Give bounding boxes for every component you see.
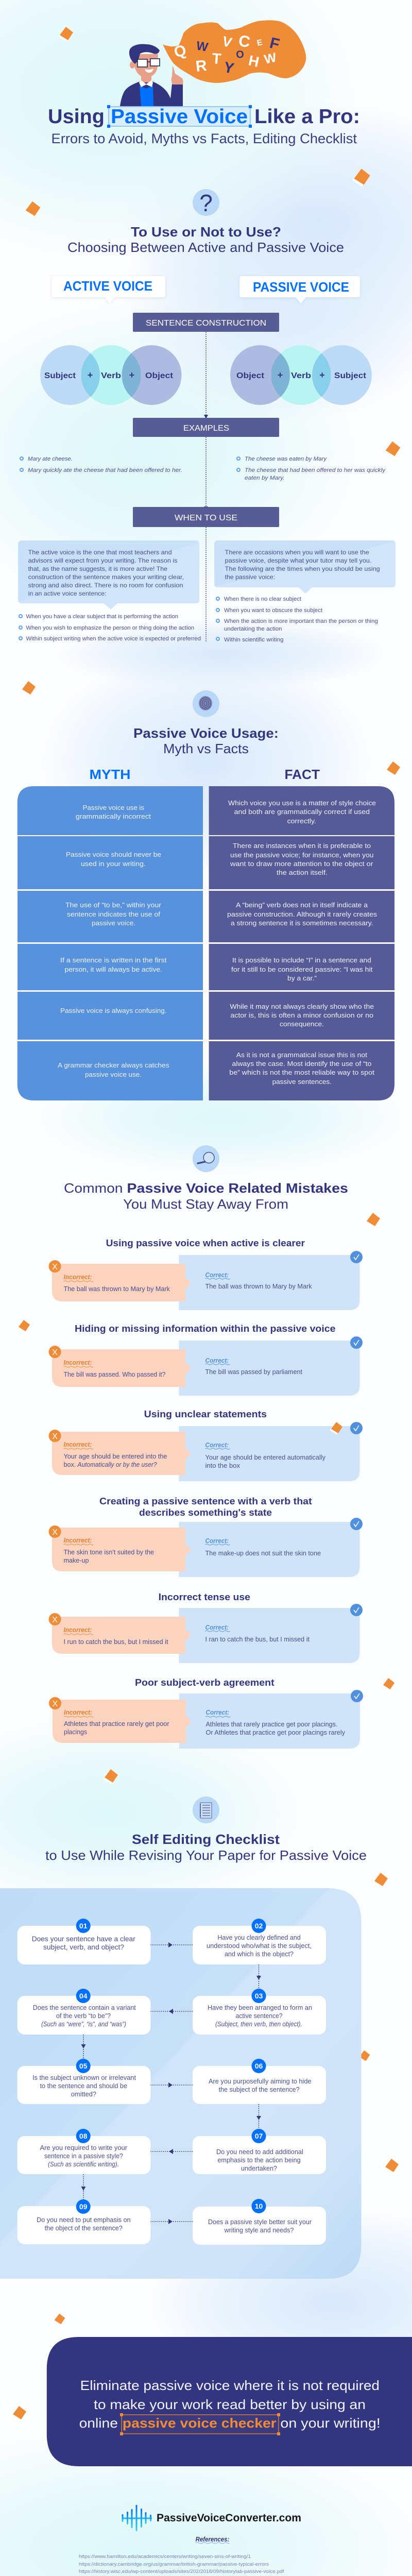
step 02: Have you clearly defined and <box>217 1934 301 1941</box>
heading: to use or not to use: Choosing Between Active and Passive Voice <box>67 240 344 255</box>
step 04 <box>18 1989 150 2035</box>
illustration: speech bubble with letters: E <box>256 38 264 48</box>
step 08 <box>18 2129 150 2174</box>
mistake 4 comparison: The skin tone isn't suited by the <box>64 1549 154 1556</box>
callout: when to use active: advisors will expect from your writing. The reason is <box>28 557 178 564</box>
panel: call to action <box>47 2337 412 2466</box>
list: active voice uses <box>19 614 201 642</box>
panel: checklist flow <box>0 1888 362 2279</box>
illustration: speech bubble with letters: O <box>235 48 245 61</box>
callout: when to use passive: The following are the times when you should be using <box>225 565 380 572</box>
mistake 3 comparison: Your age should be entered automatically <box>205 1454 326 1461</box>
step 04: of the verb “to be”? <box>56 2012 111 2020</box>
diagram: passive voice construction: Verb <box>291 371 311 380</box>
table: fact column: use the passive voice; for instance, when you <box>230 851 374 859</box>
list: passive voice uses: When you want to obscure the subject <box>224 607 322 614</box>
table: fact column: As it is not a grammatical issue this is not <box>236 1051 367 1059</box>
title <box>48 105 360 128</box>
step 10: Does a passive style better suit your <box>208 2218 312 2226</box>
step 05: to the sentence and should be <box>40 2082 127 2090</box>
mistake 4 comparison <box>49 1518 363 1577</box>
callout: when to use active <box>18 540 199 609</box>
mistake 4 comparison: make-up <box>64 1557 89 1564</box>
examples: passive: The cheese that had been offered to her was quickly <box>245 467 386 473</box>
title: Passive Voice <box>111 106 248 128</box>
table: fact column: A “being” verb does not in itself indicate a <box>236 901 368 909</box>
mistake 4 heading: Creating a passive sentence with a verb that <box>99 1496 312 1506</box>
heading: self editing checklist: to Use While Revising Your Paper for Passive Voice <box>45 1848 367 1863</box>
diagram: passive voice construction: + <box>278 370 283 380</box>
label: sentence construction <box>133 313 279 332</box>
references list: https://dictionary.cambridge.org/us/grammar/british-grammar/passive-typical-errors <box>79 2562 269 2567</box>
mistake 1 comparison: Correct: <box>205 1271 229 1279</box>
arrow: examples to when to use <box>204 437 208 511</box>
diagram: active voice construction: Verb <box>101 371 121 380</box>
mistake 3 comparison: into the box <box>205 1462 241 1469</box>
illustration: speech bubble with letters: T <box>212 50 222 67</box>
panel: call to action: on your writing! <box>280 2415 381 2431</box>
step 07: emphasis to the action being <box>217 2157 301 2164</box>
step 01: subject, verb, and object? <box>43 1943 124 1951</box>
table: fact column: actor is, this is often a minor confusion or no <box>230 1011 373 1019</box>
label: examples <box>133 418 279 437</box>
callout: active voice <box>52 276 165 303</box>
table: myth column: A grammar checker always catches <box>58 1061 169 1069</box>
list: active voice uses: When you have a clear subject that is performing the action <box>26 614 178 620</box>
icon: checklist notebook <box>193 1797 219 1823</box>
table: fact column: be” which is not the most reliable way to spot <box>229 1069 374 1076</box>
step 08: Are you required to write your <box>40 2144 127 2151</box>
icon: question mark <box>193 189 219 216</box>
mistake 5 comparison: X <box>52 1616 58 1624</box>
step 06: Are you purposefully aiming to hide <box>209 2078 312 2085</box>
diagram: active voice construction: + <box>88 370 93 380</box>
examples: passive: eaten by Mary. <box>245 475 284 481</box>
mistake 5 comparison: Correct: <box>205 1623 229 1631</box>
step 06 <box>193 2059 326 2104</box>
table: myth column: passive voice. <box>92 919 135 927</box>
mistake 1 comparison: Incorrect: <box>64 1273 92 1281</box>
diagram: passive voice construction: + <box>319 370 325 380</box>
step 06: the subject of the sentence? <box>218 2086 300 2093</box>
title: Using <box>48 106 105 128</box>
heading: common mistakes <box>64 1180 348 1212</box>
mistake 2 comparison: The bill was passed by parliament <box>205 1368 303 1376</box>
table: myth column: Passive voice use is <box>83 804 144 811</box>
diagram: passive voice construction <box>230 345 372 405</box>
table: fact column <box>209 786 394 1100</box>
mistake 5 comparison <box>49 1604 363 1663</box>
logo: PassiveVoiceConverter.com <box>122 2505 301 2531</box>
diagram: passive voice construction: Subject <box>334 371 367 380</box>
mistake 3 comparison: Your age should be entered into the <box>64 1453 167 1460</box>
icon: fingerprint <box>193 690 219 717</box>
table: fact column: and both are grammatically correct if used <box>234 808 370 816</box>
illustration: man with glasses <box>120 44 183 106</box>
step 09 <box>18 2199 150 2244</box>
heading: common mistakes: Passive Voice Related Mistakes <box>127 1180 348 1196</box>
step 03: active sentence? <box>236 2012 283 2020</box>
table: myth column <box>18 786 203 1100</box>
icon: magnifying glass <box>193 1145 219 1172</box>
heading: passive voice usage: Myth vs Facts <box>163 741 249 756</box>
panel: call to action: Eliminate passive voice where it is not required <box>80 2378 380 2393</box>
list: passive voice uses: undertaking the action <box>224 626 282 632</box>
label: examples: EXAMPLES <box>183 424 229 433</box>
mistake 1 heading: Using passive voice when active is clearer <box>106 1238 305 1248</box>
mistake 3 comparison: X <box>52 1432 58 1441</box>
mistake 5 comparison: I ran to catch the bus, but I missed it <box>205 1636 310 1643</box>
table: myth column: person, it will always be active. <box>65 965 162 973</box>
mistake 4 comparison: Correct: <box>205 1537 229 1545</box>
table: myth column: used in your writing. <box>81 860 146 868</box>
table: fact column: by a car.” <box>287 974 317 982</box>
table: fact column: passive construction. Although it rarely creates <box>227 910 377 918</box>
highlight: passive voice checker: passive voice checker <box>123 2415 277 2431</box>
highlight: passive voice checker <box>120 2413 280 2435</box>
heading: self editing checklist <box>45 1832 367 1863</box>
examples: passive: The cheese was eaten by Mary <box>245 456 328 462</box>
title highlight selection box <box>107 105 252 128</box>
diagram: active voice construction: Object <box>145 371 174 380</box>
mistake 1 comparison: The ball was thrown to Mary by Mark <box>205 1283 312 1290</box>
flow arrows <box>81 1942 261 2224</box>
heading: self editing checklist: Self Editing Checklist <box>132 1832 280 1847</box>
callout: passive voice: PASSIVE VOICE <box>253 279 349 295</box>
examples: passive <box>237 456 386 481</box>
table: myth column: Passive voice should never be <box>66 851 161 858</box>
mistake 4 heading: describes something's state <box>139 1507 272 1518</box>
callout: when to use active: construction of the sentence makes your writing clear, <box>28 573 184 581</box>
callout: when to use passive: the passive voice: <box>225 573 275 581</box>
logo: PassiveVoiceConverter.com: PassiveVoiceConverter.com <box>157 2512 301 2524</box>
step 04: (Such as “were”, “is”, and “was”) <box>41 2021 126 2028</box>
step 03: (Subject, then verb, then object). <box>215 2021 302 2028</box>
step 01: Does your sentence have a clear <box>32 1935 135 1943</box>
step 07: Do you need to add additional <box>216 2148 303 2156</box>
references list <box>79 2554 348 2576</box>
references heading: References: <box>196 2535 229 2543</box>
icon: question mark: ? <box>199 190 213 216</box>
step 03: 03 <box>255 1992 263 2000</box>
mistake 3 comparison: box. <box>64 1461 76 1468</box>
table: myth column: Passive voice is always confusing. <box>60 1007 167 1014</box>
mistake 3 heading: Using unclear statements <box>144 1409 267 1419</box>
step 01: 01 <box>79 1922 88 1930</box>
step 05: Is the subject unknown or irrelevant <box>32 2074 136 2081</box>
step 08: 08 <box>79 2132 88 2140</box>
illustration: speech bubble with letters <box>163 20 306 83</box>
table: fact column: passive sentences. <box>272 1078 332 1086</box>
mistake 6 comparison: Or Athletes that practice get poor placings rarely <box>206 1729 346 1736</box>
mistake 3 comparison <box>49 1422 363 1481</box>
label: sentence construction: SENTENCE CONSTRUCTION <box>146 319 266 328</box>
list: passive voice uses: Within scientific writing <box>224 637 283 643</box>
mistake 2 comparison: Incorrect: <box>64 1359 92 1366</box>
illustration: speech bubble with letters: V <box>221 33 233 50</box>
step 07 <box>193 2129 326 2174</box>
illustration: speech bubble with letters: Y <box>222 59 235 77</box>
diagram: active voice construction: Subject <box>44 371 76 380</box>
mistake 3 comparison: Correct: <box>205 1441 229 1449</box>
illustration: speech bubble with letters: R <box>195 57 208 75</box>
step 10 <box>193 2199 326 2245</box>
mistake 5 heading: Incorrect tense use <box>159 1592 250 1602</box>
heading: passive voice usage: Passive Voice Usage: <box>133 725 279 741</box>
references list: https://www.hamilton.edu/academics/centers/writing/seven-sins-of-writing/1 <box>79 2554 251 2560</box>
callout: when to use active: that, as the name suggests, it is more active! The <box>28 565 167 572</box>
table: fact column: correctly. <box>287 817 316 825</box>
mistake 1 comparison <box>49 1251 363 1310</box>
callout: when to use active: in an active voice sentence: <box>28 590 107 597</box>
illustration: speech bubble with letters: C <box>237 31 251 51</box>
mistake 5 comparison: I run to catch the bus, but I missed it <box>64 1638 168 1646</box>
examples: active: Mary ate cheese. <box>28 456 73 462</box>
step 05: omitted? <box>71 2091 96 2098</box>
diagram: passive voice construction: Object <box>236 371 265 380</box>
mistake 1 comparison: X <box>52 1263 58 1272</box>
illustration: speech bubble with letters: Q <box>172 42 188 61</box>
table: fact column: for it still to be considered passive: “I was hit <box>231 965 373 973</box>
mistake 6 comparison <box>49 1690 363 1749</box>
mistake 5 comparison: Incorrect: <box>64 1626 92 1634</box>
illustration: speech bubble with letters: W <box>195 39 209 55</box>
mistake 3 comparison: Automatically or by the user? <box>77 1461 157 1468</box>
callout: passive voice <box>239 276 360 303</box>
references list: https://history.wisc.edu/wp-content/uploads/sites/202/2018/09/historylab-passive-voice.pdf <box>79 2569 284 2574</box>
step 02: understood who/what is the subject, <box>207 1942 312 1950</box>
mistake 2 comparison: X <box>52 1348 58 1357</box>
step 02: and which is the object? <box>225 1951 294 1958</box>
label: when to use: WHEN TO USE <box>175 514 237 522</box>
table: fact column: It is possible to include “I” in a sentence and <box>232 956 371 964</box>
list: active voice uses: When you wish to emphasize the person or thing doing the action <box>26 625 194 631</box>
mistake 4 heading <box>99 1496 312 1518</box>
step 04: Does the sentence contain a variant <box>33 2004 136 2011</box>
list: passive voice uses: When the action is more important than the person or thing <box>224 618 378 624</box>
heading: passive voice usage <box>133 725 279 756</box>
step 09: 09 <box>79 2202 88 2211</box>
mistake 1 comparison: The ball was thrown to Mary by Mark <box>64 1285 170 1293</box>
title: Like a Pro: <box>254 106 360 128</box>
diagram: active voice construction <box>40 345 181 405</box>
table: fact column: There are instances when it is preferable to <box>233 842 371 850</box>
table: myth column: grammatically incorrect <box>76 812 151 820</box>
table: fact column: a strong sentence it is sometimes necessary. <box>231 919 373 927</box>
callout: active voice: ACTIVE VOICE <box>63 278 152 294</box>
step 10: 10 <box>255 2202 263 2210</box>
mistake 6 comparison: X <box>53 1700 58 1708</box>
table: fact column: consequence. <box>280 1020 324 1028</box>
step 05 <box>18 2059 150 2104</box>
arrow: sentence construction to examples <box>204 332 208 419</box>
table: myth column: sentence indicates the use of <box>67 910 160 918</box>
mistake 2 heading: Hiding or missing information within the passive voice <box>75 1324 336 1334</box>
step 02 <box>193 1919 326 1964</box>
table: myth column: If a sentence is written in the first <box>60 956 167 964</box>
step 06: 06 <box>255 2062 263 2070</box>
step 10: writing style and needs? <box>224 2227 294 2234</box>
table: fact column: want to draw more attention to the object or <box>230 860 373 868</box>
mistake 6 comparison: Athletes that rarely practice get poor placings. <box>206 1721 338 1728</box>
label: when to use <box>133 507 279 527</box>
heading: to use or not to use: To Use or Not to Use? <box>131 224 281 240</box>
step 07: undertaken? <box>241 2165 277 2172</box>
mistake 6 comparison: Correct: <box>206 1708 229 1716</box>
callout: when to use passive <box>214 540 396 594</box>
mistake 4 comparison: Incorrect: <box>64 1536 92 1544</box>
illustration: speech bubble with letters: H <box>247 53 261 70</box>
table: myth column: The use of “to be,” within your <box>65 901 162 909</box>
heading: common mistakes: Common <box>64 1180 123 1196</box>
step 03 <box>193 1989 326 2035</box>
list: passive voice uses <box>216 596 378 643</box>
list: passive voice uses: When there is no clear subject <box>224 596 301 602</box>
examples: active: Mary quickly ate the cheese that had been offered to her. <box>28 467 182 473</box>
examples: active <box>20 456 182 473</box>
illustration: speech bubble with letters: F <box>268 35 281 53</box>
mistake 2 comparison <box>49 1336 363 1396</box>
table: myth column: passive voice use. <box>85 1071 142 1078</box>
mistake 4 comparison: X <box>52 1528 58 1537</box>
step 08: (Such as scientific writing). <box>48 2161 119 2168</box>
mistake 6 heading: Poor subject-verb agreement <box>135 1677 274 1688</box>
step 09: Do you need to put emphasis on <box>37 2216 131 2224</box>
step 02: 02 <box>255 1922 263 1930</box>
table: fact column: the action itself. <box>277 869 328 876</box>
list: active voice uses: Within subject writing when the active voice is expected or preferred <box>26 636 201 642</box>
column heading: fact: FACT <box>284 767 320 782</box>
callout: when to use active: The active voice is the one that most teachers and <box>28 549 172 556</box>
decorative diamond over mistake 3 <box>330 1422 342 1435</box>
mistake 2 comparison: The bill was passed. Who passed it? <box>64 1371 165 1378</box>
illustration: speech bubble with letters: W <box>263 50 278 67</box>
heading: to use or not to use <box>67 224 344 255</box>
mistake 6 comparison: placings <box>64 1728 87 1736</box>
subtitle: Errors to Avoid, Myths vs Facts, Editing Checklist <box>52 131 357 146</box>
mistake 6 comparison: Athletes that practice rarely get poor <box>64 1720 169 1727</box>
mistake 2 comparison: Correct: <box>205 1357 229 1364</box>
step 08: sentence in a passive style? <box>44 2153 123 2160</box>
mistake 4 comparison: The make-up does not suit the skin tone <box>205 1550 321 1557</box>
table: fact column: always the case. Most identify the use of “to <box>232 1060 371 1067</box>
mistake 3 comparison: Incorrect: <box>64 1440 92 1448</box>
step 09: the object of the sentence? <box>45 2225 123 2232</box>
table: fact column: Which voice you use is a matter of style choice <box>228 799 376 807</box>
panel: call to action: online <box>79 2415 118 2431</box>
step 04: 04 <box>79 1992 88 2000</box>
step 05: 05 <box>79 2062 88 2070</box>
divider line: when to use <box>205 527 207 641</box>
diagram: active voice construction: + <box>129 370 134 380</box>
step 01 <box>18 1919 150 1964</box>
callout: when to use passive: passive voice, despite what your tutor may tell you. <box>225 557 371 564</box>
column heading: myth: MYTH <box>90 767 131 782</box>
step 07: 07 <box>255 2132 263 2140</box>
heading: common mistakes: You Must Stay Away From <box>123 1196 288 1212</box>
table: fact column: While it may not always clearly show who the <box>230 1003 374 1010</box>
callout: when to use passive: There are occasions when you will want to use the <box>225 549 369 556</box>
callout: when to use active: strong and also direct. There is no room for confusion <box>28 582 183 589</box>
panel: call to action: to make your work read better by using an <box>94 2397 366 2412</box>
mistake 6 comparison: Incorrect: <box>64 1708 92 1716</box>
step 03: Have they been arranged to form an <box>208 2004 312 2011</box>
